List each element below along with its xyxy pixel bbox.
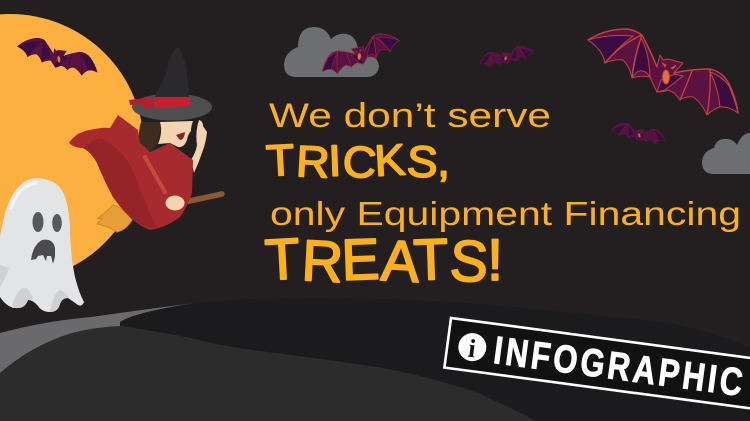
- line: TREATS!: TREATS!: [263, 226, 503, 295]
- hand on broom: [166, 196, 184, 210]
- cape highlight: [145, 157, 165, 192]
- label text: INFOGRAPHIC: [491, 329, 748, 405]
- ghost body: [0, 178, 84, 312]
- info icon: [456, 331, 488, 365]
- line: We don't serve: We don’t serve: [269, 97, 551, 135]
- hills: [0, 298, 750, 421]
- cloud right: [702, 133, 750, 174]
- info icon: i: [467, 334, 478, 363]
- hill: lighter front hill: [0, 326, 536, 421]
- ghost highlight: [11, 183, 36, 208]
- face: [158, 121, 193, 147]
- cloud left: [284, 27, 379, 77]
- small bat lower: [611, 114, 665, 154]
- ghost mouth: [31, 240, 55, 264]
- bat on moon: [17, 30, 97, 84]
- cape: [69, 115, 193, 230]
- infographic label: [444, 318, 750, 411]
- road: grey path: [0, 303, 195, 373]
- large bat: [588, 29, 738, 115]
- witch on broom: [69, 47, 222, 232]
- hat cone: [154, 47, 189, 98]
- line: TRICKS,: TRICKS,: [265, 135, 450, 188]
- ghost left eye: [32, 212, 44, 232]
- broom bristles: [97, 205, 132, 232]
- ghost right eye: [52, 214, 62, 232]
- ghost: [0, 178, 84, 312]
- bat over cloud: [322, 30, 400, 78]
- hair: [139, 122, 162, 153]
- mouth: [176, 132, 185, 140]
- hill: dark back hill: [120, 298, 750, 421]
- broom stick: [180, 194, 222, 203]
- hat brim: [132, 94, 212, 120]
- small bat upper: [480, 37, 534, 77]
- ghost lower shading: [0, 265, 68, 312]
- line: only Equipment Financing: only Equipment Financing: [270, 196, 741, 233]
- hat bow: [129, 97, 154, 109]
- raised arm and hand: [191, 120, 207, 173]
- label box: [444, 318, 750, 411]
- cape shading: [83, 138, 158, 229]
- hat band: [154, 97, 190, 108]
- full moon: [0, 14, 144, 282]
- headline: [263, 97, 741, 295]
